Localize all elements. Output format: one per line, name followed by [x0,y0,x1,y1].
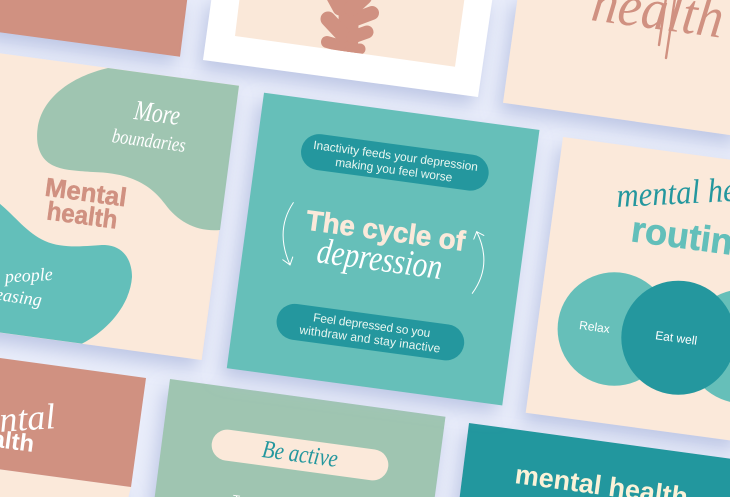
panel: dark teal mental health card [458,423,730,497]
circle: Eat well [621,281,730,395]
text: More boundaries: boundaries [111,125,187,157]
circle: Relax: Relax [578,318,611,336]
text: less people pleasing [0,264,53,310]
circle: Eat well: Eat well [654,328,698,348]
panel: peach card top right [503,0,730,137]
text: More boundaries [111,95,187,157]
teal blob [0,200,132,344]
circle: right, cropped [686,289,730,403]
pill: Be active: Be active [261,436,340,473]
heading: depression script: depression [315,230,445,287]
panel: white framed leaf card [203,0,493,97]
text: More boundaries: More [132,95,182,132]
heading: Mental health: Mental [43,172,129,212]
pill: feel depressed: Feel depressed so you [312,310,431,340]
pill: feel depressed: withdraw and stay inactive [298,323,442,356]
heading: The cycle of: The cycle of [304,205,468,257]
panel: the cycle of depression [227,93,539,405]
arrow: left downward [279,202,300,265]
pill: inactivity: Inactivity feeds your depression [313,138,479,174]
panel: salmon mental health card bottom left [0,357,146,497]
panel: peach routine card [526,137,730,442]
circle: Relax [558,272,671,386]
pill: feel depressed [274,302,466,363]
green blob [37,68,239,230]
icon: salmon leaf [327,0,372,52]
panel: mental health blob card [0,46,239,360]
heading: Mental health [43,172,129,235]
panel: salmon card top left [0,0,188,57]
panel: green Be active card [153,379,446,497]
pill: inactivity [299,132,491,193]
pill: inactivity: making you feel worse [334,155,454,185]
pill: Be active [210,428,390,482]
heading: Mental health: health [45,195,119,235]
arrow: right upward [467,231,488,294]
